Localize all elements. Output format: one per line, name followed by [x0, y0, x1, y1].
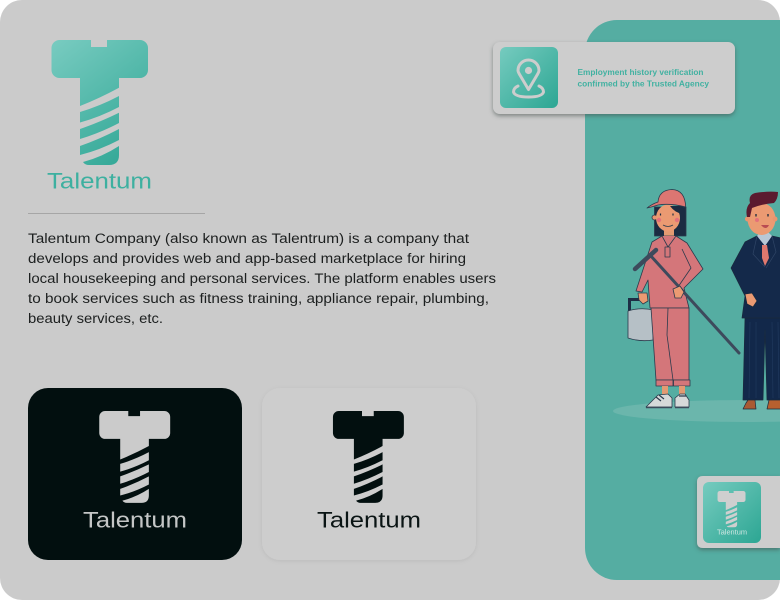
panel: dark logo card — [28, 388, 242, 560]
description paragraph: local housekeeping and personal services. The platform enables users — [28, 271, 496, 287]
light card wordmark: Talentum — [317, 508, 421, 532]
panel: verification card — [493, 42, 735, 114]
cap — [647, 190, 686, 208]
description paragraph: develops and provides web and app-based marketplace for hiring — [28, 251, 466, 267]
verification text: Employment history verification — [578, 68, 704, 77]
jacket — [731, 236, 780, 318]
face details — [756, 214, 768, 216]
panel: light logo card — [262, 388, 476, 560]
logo wordmark: Talentum — [47, 168, 152, 194]
verification text: confirmed by the Trusted Agency — [578, 80, 710, 88]
icon: small screw mark — [718, 491, 746, 527]
ground shadow — [613, 400, 780, 422]
trousers — [743, 318, 780, 400]
dark card wordmark: Talentum — [83, 508, 187, 532]
description paragraph: beauty services, etc. — [28, 311, 163, 327]
neck and face — [664, 230, 674, 236]
hand — [745, 293, 757, 307]
hair — [746, 192, 778, 217]
sneakers — [646, 394, 672, 407]
illustration: woman with mop and bucket — [628, 190, 739, 408]
hands — [673, 286, 684, 298]
panel: app icon card — [697, 476, 780, 548]
mop — [650, 255, 739, 353]
head — [748, 203, 776, 235]
icon: screw T mark — [52, 40, 148, 165]
description paragraph — [28, 231, 496, 327]
app icon tile — [703, 482, 761, 543]
description paragraph: to book services such as fitness training, appliance repair, plumbing, — [28, 291, 489, 307]
shirt — [636, 236, 703, 308]
description paragraph: Talentum Company (also known as Talentrum) is a company that — [28, 231, 469, 247]
illustration: man in suit — [731, 192, 780, 409]
icon: dark screw mark — [333, 411, 404, 503]
shoes — [743, 400, 756, 409]
cuffs — [656, 380, 673, 386]
shirt and tie — [757, 232, 772, 245]
app icon wordmark: Talentum — [717, 530, 747, 536]
verification text — [578, 68, 710, 88]
bucket — [628, 298, 640, 310]
icon: light screw mark — [99, 411, 170, 503]
main logo — [47, 40, 152, 194]
panel: teal illustration panel — [585, 20, 780, 580]
pants — [651, 308, 689, 380]
hair — [654, 207, 686, 236]
icon tile — [500, 47, 558, 108]
ankles — [662, 386, 668, 395]
icon: location pin — [514, 60, 544, 97]
